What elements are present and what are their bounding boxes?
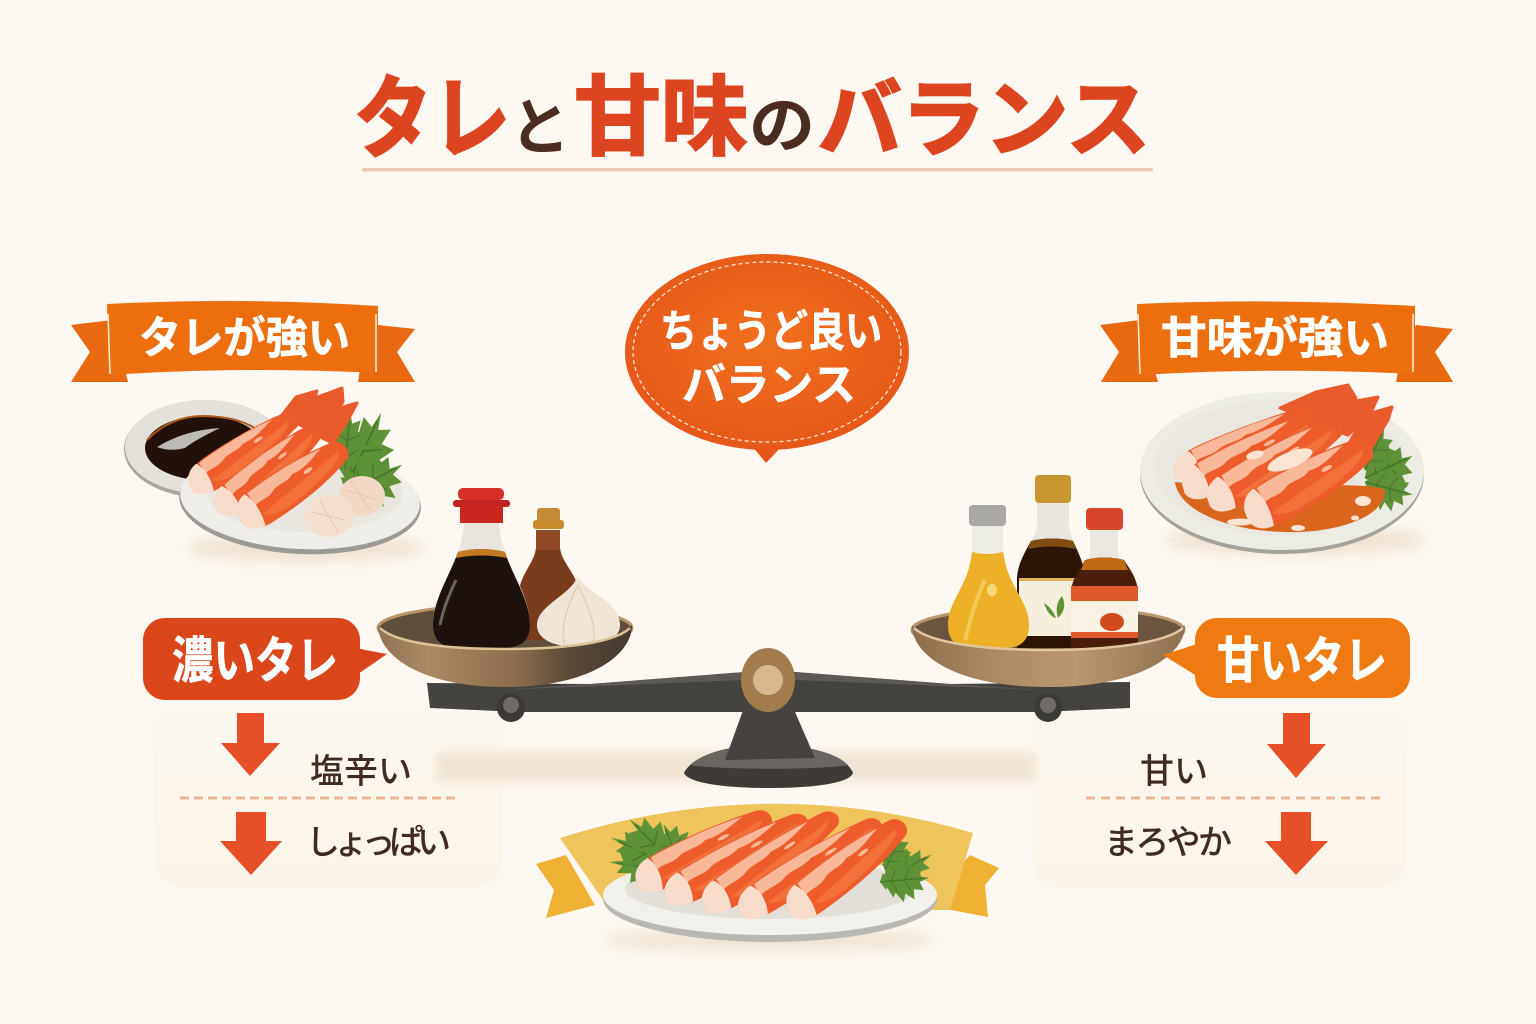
main plate	[176, 443, 424, 560]
title	[354, 68, 1150, 170]
cream dollops	[1227, 444, 1371, 531]
left pan with bottles	[378, 488, 632, 687]
text: sweet: 甘い	[1140, 753, 1208, 791]
label: strong sauce	[143, 618, 387, 700]
pan front	[378, 625, 632, 687]
banner: sweet strong: 甘味が強い	[1161, 314, 1389, 363]
title: と	[510, 94, 570, 163]
speech bubble: balance: ちょうど良い	[660, 307, 882, 356]
banner: sweet strong	[1100, 301, 1453, 382]
shiso leaf	[1345, 420, 1424, 517]
pan front	[912, 625, 1185, 687]
illustration: right plate with sweet sauce	[1140, 385, 1425, 555]
title underline	[362, 168, 1153, 172]
shiso leaf	[320, 401, 416, 520]
panel: left taste notes	[155, 690, 503, 888]
scale beam	[427, 672, 1130, 722]
illustration: left plate with dipping sauce	[124, 388, 424, 562]
title: 甘味	[574, 68, 748, 167]
label: strong sauce: 濃いタレ	[172, 633, 338, 689]
panel: right taste notes	[1032, 690, 1407, 888]
icon: left arrow 1	[221, 713, 280, 776]
ribbon	[560, 804, 973, 910]
speech bubble: balance	[625, 254, 909, 463]
claws	[1280, 385, 1392, 450]
label: sweet sauce	[1163, 618, 1410, 698]
crab sticks	[181, 404, 358, 537]
label: sweet sauce: 甘いタレ	[1217, 633, 1387, 689]
banner: tare strong	[71, 301, 415, 382]
title: バランス	[818, 73, 1150, 167]
mid bottle	[1017, 475, 1085, 648]
crab sticks	[628, 800, 917, 928]
brown bottle	[518, 508, 580, 640]
claws	[278, 388, 357, 443]
sauce pool	[1175, 482, 1385, 532]
text: mellow: まろやか	[1104, 824, 1232, 862]
ribbon tails	[536, 855, 999, 918]
scale stand base	[684, 745, 853, 788]
text: salty: 塩辛い	[310, 753, 412, 791]
illustration: balanced plate on ribbon	[536, 800, 999, 952]
sauce dish	[124, 400, 286, 498]
title: タレ	[354, 70, 510, 170]
scale pivot	[741, 648, 795, 712]
garlic	[537, 575, 620, 647]
icon: right arrow 1	[1267, 713, 1326, 778]
icon: right arrow 2	[1265, 812, 1328, 875]
scallops	[304, 476, 385, 537]
title: の	[749, 92, 815, 161]
plate	[1140, 392, 1424, 554]
ground shadow	[436, 752, 1036, 782]
scale post	[725, 705, 815, 760]
plate	[603, 855, 937, 942]
red label bottle	[1071, 508, 1138, 648]
soy bottle	[433, 488, 530, 648]
pan interior	[912, 607, 1184, 653]
text: shoppai: しょっぱい	[306, 824, 451, 862]
crab sticks	[1168, 399, 1383, 537]
yellow bottle	[948, 505, 1029, 648]
speech bubble: balance: バランス	[682, 361, 856, 410]
icon: left arrow 2	[220, 812, 282, 875]
illustration: balance scale	[378, 475, 1185, 788]
pan interior	[378, 605, 632, 651]
shiso leaves	[602, 803, 941, 904]
banner: tare strong: タレが強い	[139, 314, 350, 363]
right pan with bottles	[912, 475, 1185, 687]
